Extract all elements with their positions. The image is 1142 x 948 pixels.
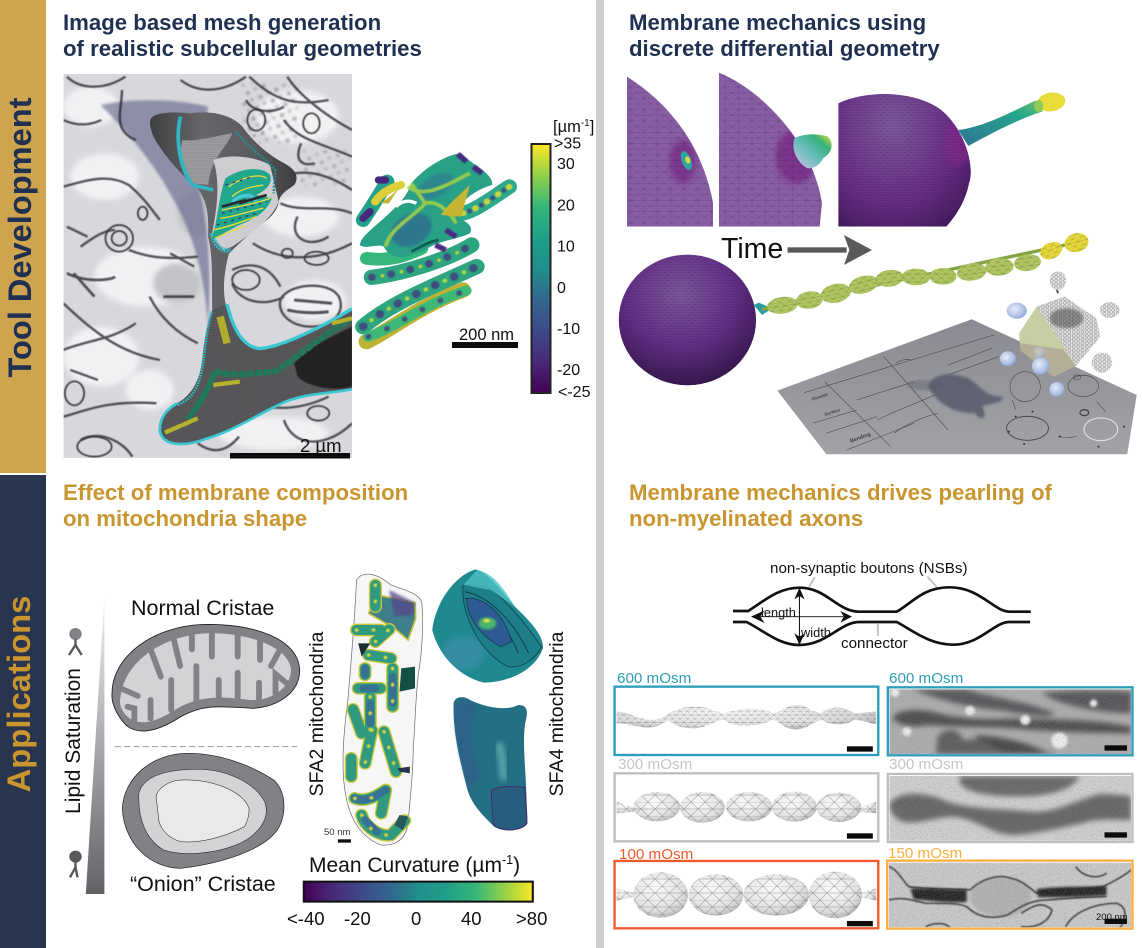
schematic labels: width <box>800 625 831 640</box>
scale bar: 2 µm: 2 µm <box>300 435 342 456</box>
condition labels: 300 mOsm <box>889 756 963 773</box>
schematic labels <box>761 560 968 652</box>
colour bar ticks: <-40 <box>287 908 325 929</box>
box: simulation 600 mOsm <box>615 687 878 755</box>
label: onion cristae: “Onion” Cristae <box>130 872 276 896</box>
heading: membrane composition: Effect of membrane composition <box>63 480 408 505</box>
label: lipid saturation: Lipid Saturation <box>62 668 85 814</box>
colour bar: curvature: >35 <box>554 136 581 152</box>
onion cristae diagram <box>122 753 284 868</box>
colour bar: curvature: 0 <box>557 280 566 297</box>
micrograph 600 mOsm <box>888 687 1132 755</box>
dendrite mesh <box>160 304 352 443</box>
micrograph 300 mOsm <box>888 774 1132 842</box>
spine head mesh <box>150 112 297 312</box>
icon: saturated lipid <box>69 851 82 877</box>
colour bar ticks: 0 <box>411 908 421 929</box>
colour bar: curvature: ] <box>590 118 594 136</box>
curvature-coloured cristae mesh <box>360 153 509 342</box>
SFA4 outer mitochondrion <box>454 697 527 831</box>
divider <box>115 745 297 748</box>
box: simulation 300 mOsm <box>615 773 878 841</box>
label: mean curvature: ) <box>513 854 520 877</box>
scale bar: 50 nm <box>338 839 351 843</box>
SFA2 mitochondrion <box>338 574 423 845</box>
colour bar ticks <box>287 908 547 929</box>
sphere snapshot 3 <box>838 94 971 227</box>
label: normal cristae: Normal Cristae <box>131 596 274 620</box>
colour bar: curvature: -10 <box>557 321 580 338</box>
colour bar: curvature <box>532 118 594 401</box>
label: 50 nm: 50 nm <box>324 827 350 838</box>
sidebar: Applications <box>0 475 46 948</box>
colour bar: curvature: [µm <box>553 118 581 136</box>
condition labels: 150 mOsm <box>888 845 962 862</box>
pearled tube <box>754 231 1091 316</box>
sidebar: Tool Development <box>0 0 46 473</box>
schematic labels: length <box>761 605 796 620</box>
condition labels: 600 mOsm <box>889 670 963 687</box>
panel: image based mesh generation <box>63 10 594 458</box>
schematic labels: non-synaptic boutons (NSBs) <box>770 560 968 577</box>
condition labels: 600 mOsm <box>617 670 691 687</box>
colour bar ticks: 40 <box>461 908 482 929</box>
large pearled sphere <box>619 255 756 385</box>
SFA4 onion mitochondrion <box>432 569 543 683</box>
scale bar: 200 nm: 200 nm <box>459 326 514 344</box>
colour bar: curvature: 20 <box>557 198 575 214</box>
label: SFA4 mitochondria: SFA4 mitochondria <box>546 631 568 796</box>
colour bar ticks: >80 <box>516 908 547 929</box>
icosahedral vesicle <box>1000 271 1119 397</box>
dendritic spine cristae <box>212 169 272 240</box>
equation sheet <box>777 319 1137 454</box>
electron micrograph with mesh overlay <box>63 74 352 458</box>
sidebar: Applications: Applications <box>0 596 37 792</box>
colour bar: curvature: -20 <box>557 362 580 379</box>
heading: discrete differential geometry: Membrane mechanics using <box>629 10 926 35</box>
vesicle shadow <box>928 374 1003 418</box>
label: 200 nm: 200 nm <box>1096 912 1128 923</box>
heading: pearling: Membrane mechanics drives pearling of <box>629 480 1052 505</box>
normal cristae diagram <box>112 624 300 731</box>
equation sheet: Bending <box>849 432 872 444</box>
heading: membrane composition: on mitochondria shape <box>63 506 307 531</box>
heading: pearling: non-myelinated axons <box>629 506 863 531</box>
panel: membrane mechanics <box>619 10 1137 454</box>
colour bar: curvature: -1 <box>581 118 590 129</box>
equation sheet: Osmotic <box>811 391 830 402</box>
colour bar: mean curvature <box>304 882 533 902</box>
sphere snapshot 2 <box>719 70 824 228</box>
schematic labels: connector <box>841 635 908 652</box>
label: mean curvature: -1 <box>502 853 513 867</box>
time arrow <box>787 235 872 265</box>
heading: mesh generation: of realistic subcellular geometries <box>63 36 422 61</box>
colour bar: curvature: <-25 <box>558 384 591 401</box>
purple shadow arc <box>101 100 209 327</box>
scale bar: 2 µm <box>230 435 350 458</box>
box: simulation 100 mOsm <box>615 861 878 928</box>
tubule with bulb <box>958 91 1067 146</box>
icon: unsaturated lipid <box>69 628 82 655</box>
heading: mesh generation: Image based mesh generation <box>63 10 381 35</box>
panel: pearling of axons <box>615 480 1132 929</box>
condition labels <box>617 670 963 863</box>
colour bar: curvature: 10 <box>557 238 575 256</box>
equation sheet: Surface <box>824 407 841 417</box>
label: Time: Time <box>721 233 783 265</box>
colour bar ticks: -20 <box>344 908 371 929</box>
scale bar: 200 nm <box>452 326 518 348</box>
label: mean curvature: Mean Curvature (µm <box>309 854 502 877</box>
label: SFA2 mitochondria: SFA2 mitochondria <box>306 631 328 796</box>
lipid saturation gradient <box>86 597 104 894</box>
condition labels: 300 mOsm <box>618 756 692 773</box>
panel: mitochondria shape <box>62 480 568 929</box>
vesicle clusters <box>243 83 298 143</box>
column divider <box>596 0 604 948</box>
colour bar: curvature: 30 <box>557 156 575 173</box>
heading: discrete differential geometry: discrete differential geometry <box>629 36 940 61</box>
condition labels: 100 mOsm <box>619 846 693 863</box>
axon schematic <box>733 577 1031 645</box>
micrograph 150 mOsm <box>887 861 1132 929</box>
sphere snapshot 1 <box>627 70 715 228</box>
sidebar: Tool Development: Tool Development <box>1 97 38 377</box>
